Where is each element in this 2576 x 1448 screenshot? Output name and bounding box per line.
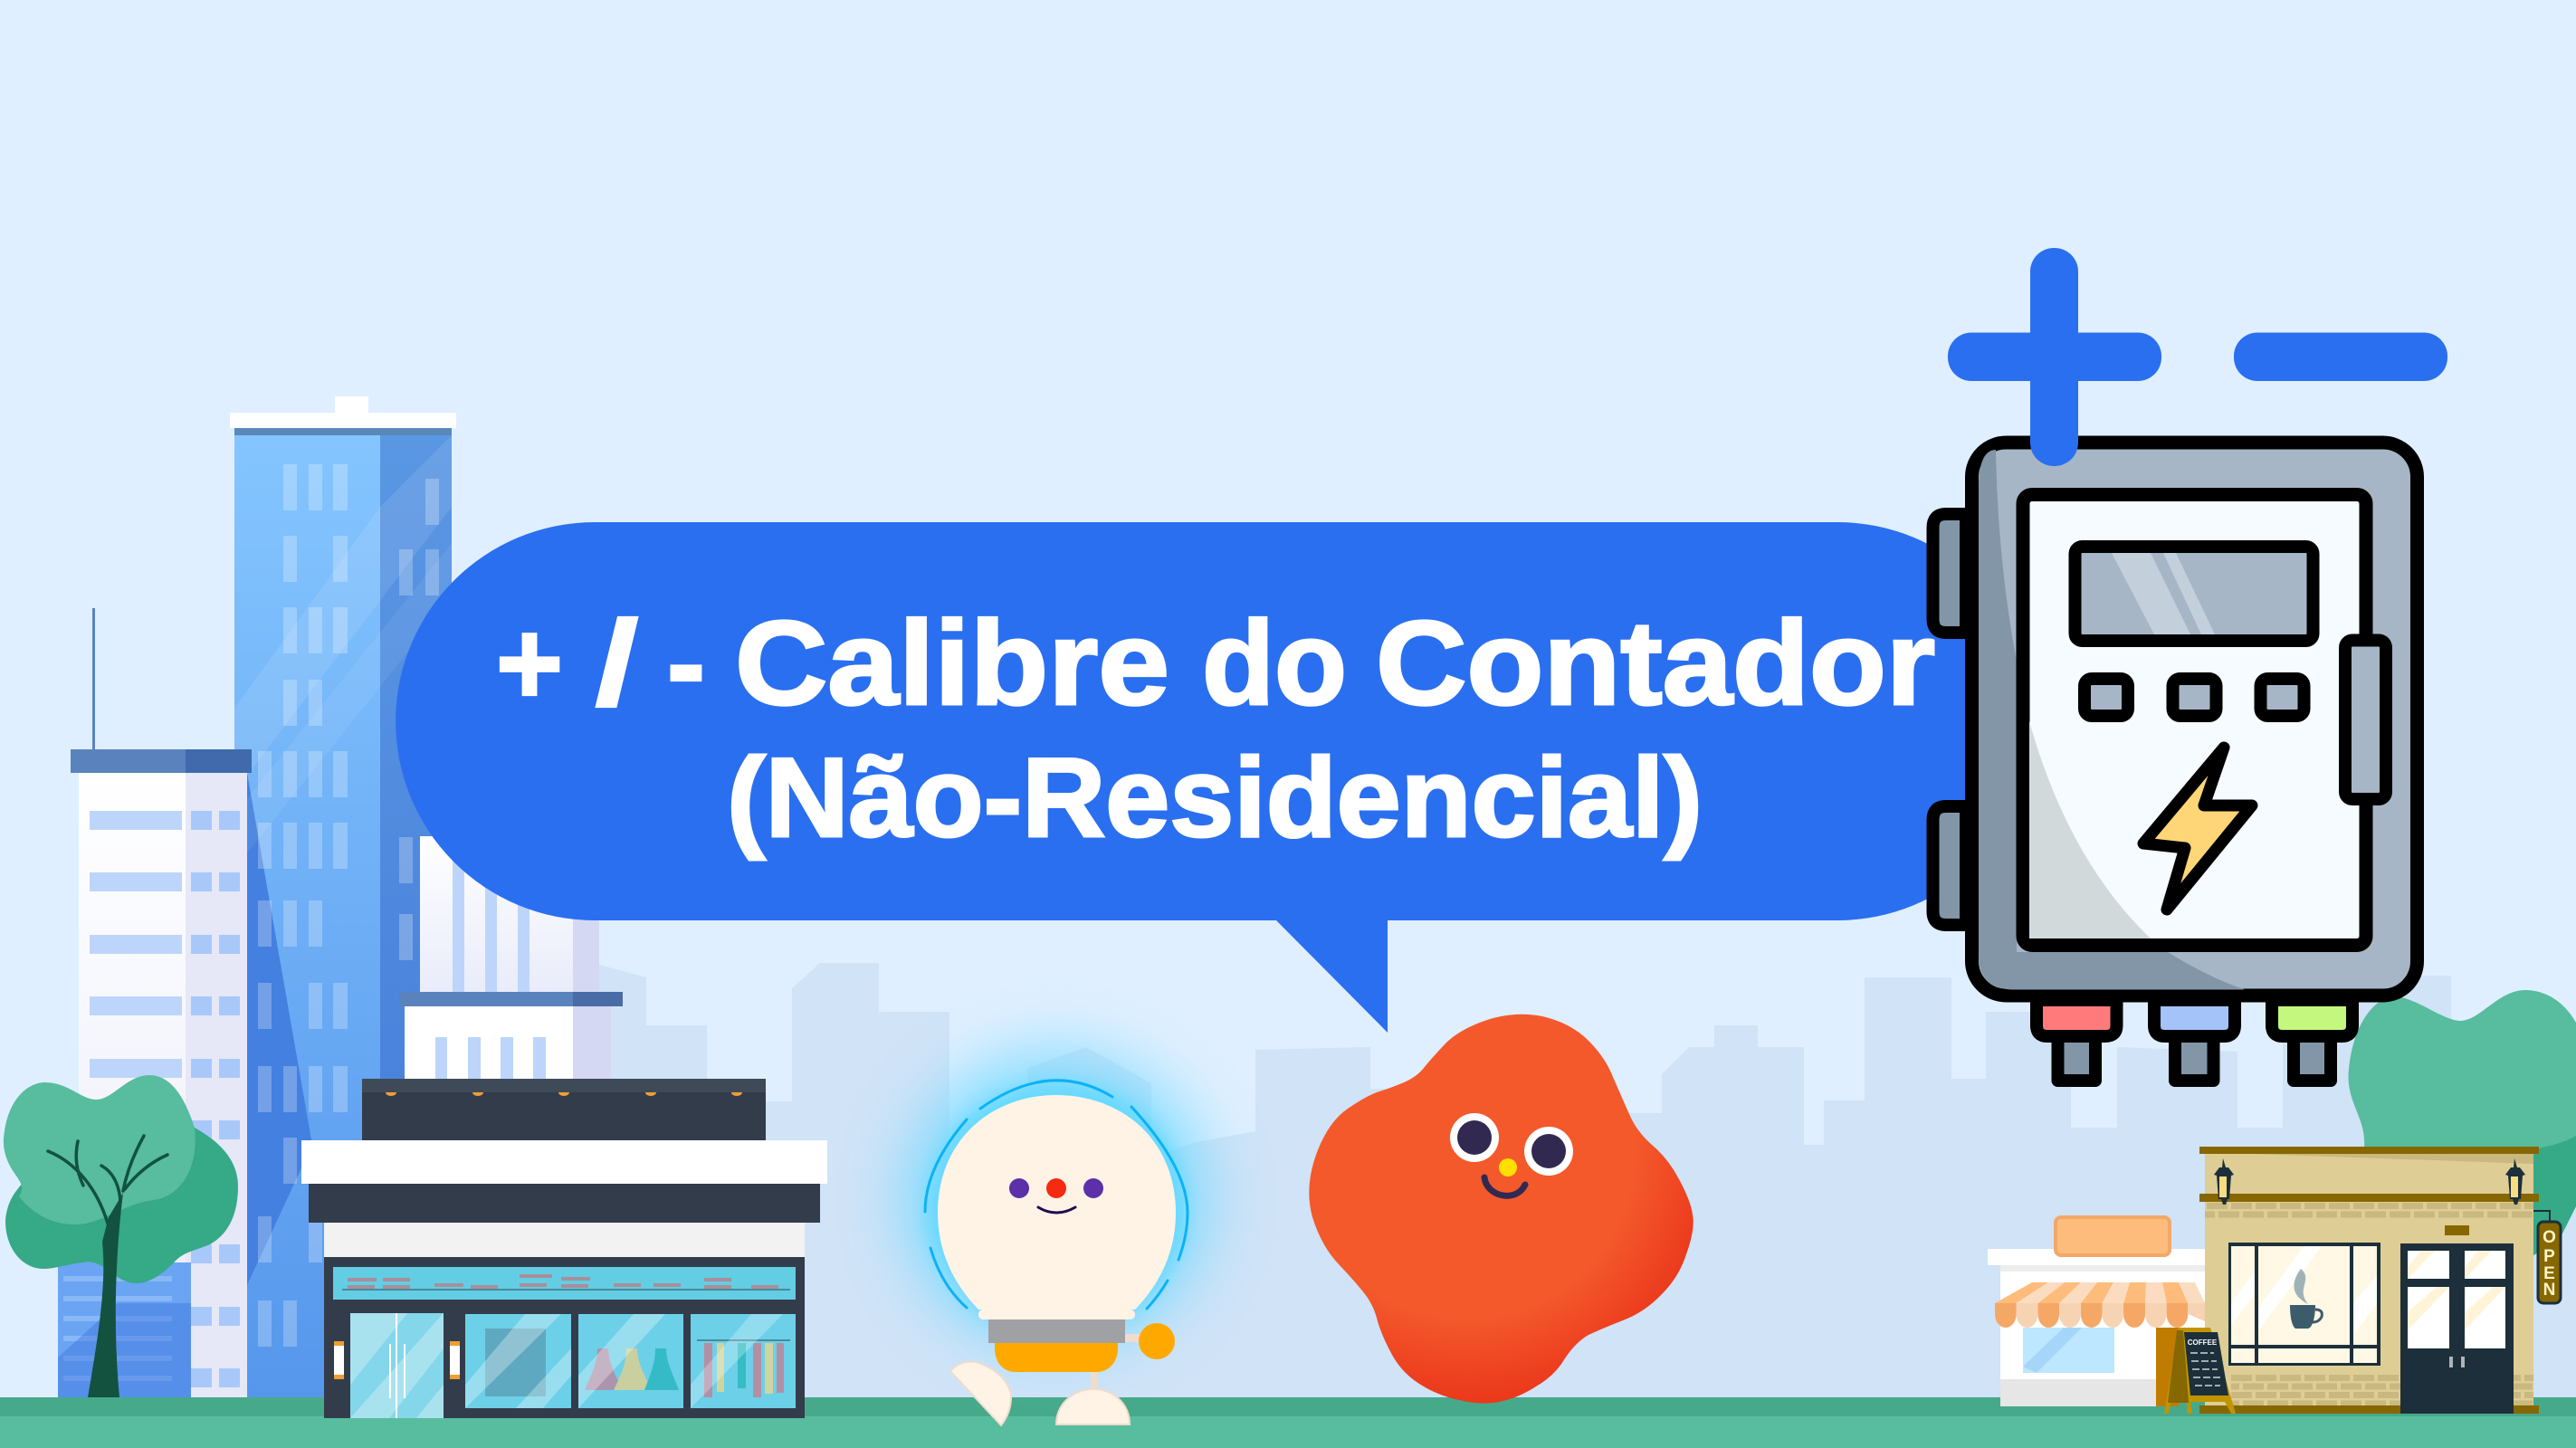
robot base xyxy=(988,1319,1125,1343)
lightning bolt xyxy=(2143,748,2252,910)
store window 1 xyxy=(465,1314,571,1408)
small blue building xyxy=(58,1262,191,1397)
robot glow xyxy=(902,1050,1210,1348)
electricity meter xyxy=(1933,443,2417,1081)
meter latch xyxy=(2345,641,2386,799)
shop awning xyxy=(1995,1282,2205,1328)
speech bubble xyxy=(396,522,2037,1033)
tall blue tower xyxy=(230,396,456,1397)
title: Contador xyxy=(1376,596,1935,729)
robot hand xyxy=(1139,1323,1175,1359)
coffee chalkboard xyxy=(2156,1328,2236,1414)
shop sign xyxy=(2056,1217,2170,1255)
coffee shop xyxy=(2199,1147,2561,1414)
cafe bars xyxy=(2199,1147,2539,1414)
open sign: E xyxy=(2543,1264,2555,1283)
open sign xyxy=(2533,1211,2561,1303)
store white fascia xyxy=(301,1140,827,1184)
title: + xyxy=(496,596,563,729)
title xyxy=(496,596,1935,861)
white office building xyxy=(71,608,252,1397)
small orange-awning shop xyxy=(1988,1217,2205,1406)
coffee chalkboard: COFFEE xyxy=(2188,1338,2218,1347)
open sign: O xyxy=(2543,1228,2556,1247)
robot leg and arm connectors xyxy=(996,1334,1152,1394)
open sign: N xyxy=(2543,1281,2555,1300)
meter case xyxy=(1971,443,2417,996)
store window 3 xyxy=(691,1314,796,1408)
title: do xyxy=(1202,596,1347,729)
title: / xyxy=(596,596,638,729)
red blob character xyxy=(1309,1015,1693,1404)
meter door panel xyxy=(2023,494,2366,945)
robot head xyxy=(938,1095,1176,1310)
blob face xyxy=(1450,1113,1573,1196)
title: - xyxy=(667,596,705,729)
meter bottom connectors xyxy=(2037,1000,2352,1081)
back white building xyxy=(399,836,623,1079)
distant city skyline xyxy=(599,963,2576,1412)
open sign: P xyxy=(2543,1247,2555,1266)
shop window xyxy=(2023,1328,2114,1373)
cafe door xyxy=(2400,1243,2514,1414)
left tree xyxy=(4,1075,238,1397)
meter side tabs xyxy=(1933,514,1966,925)
store window 2 xyxy=(578,1314,683,1408)
robot rings xyxy=(925,1081,1188,1309)
ground xyxy=(0,1397,2576,1448)
right tree xyxy=(2349,990,2576,1267)
cafe window xyxy=(2228,1243,2380,1366)
coffee cup icon xyxy=(2290,1269,2322,1329)
store shelf strip xyxy=(333,1267,796,1300)
minus sign xyxy=(2234,333,2447,381)
plus sign xyxy=(1948,248,2161,466)
title: Calibre xyxy=(735,596,1169,729)
title: (Não-Residencial) xyxy=(727,736,1703,861)
cafe wall xyxy=(2205,1154,2533,1405)
cafe lanterns xyxy=(2214,1158,2525,1205)
store door xyxy=(334,1313,460,1418)
robot character xyxy=(902,1050,1210,1425)
meter buttons xyxy=(2085,679,2304,716)
meter display xyxy=(2075,547,2314,641)
store front xyxy=(324,1257,805,1418)
robot feet xyxy=(950,1362,1011,1425)
robot face xyxy=(1009,1178,1103,1213)
store upper roof xyxy=(362,1079,766,1140)
clothing store xyxy=(301,1079,827,1418)
